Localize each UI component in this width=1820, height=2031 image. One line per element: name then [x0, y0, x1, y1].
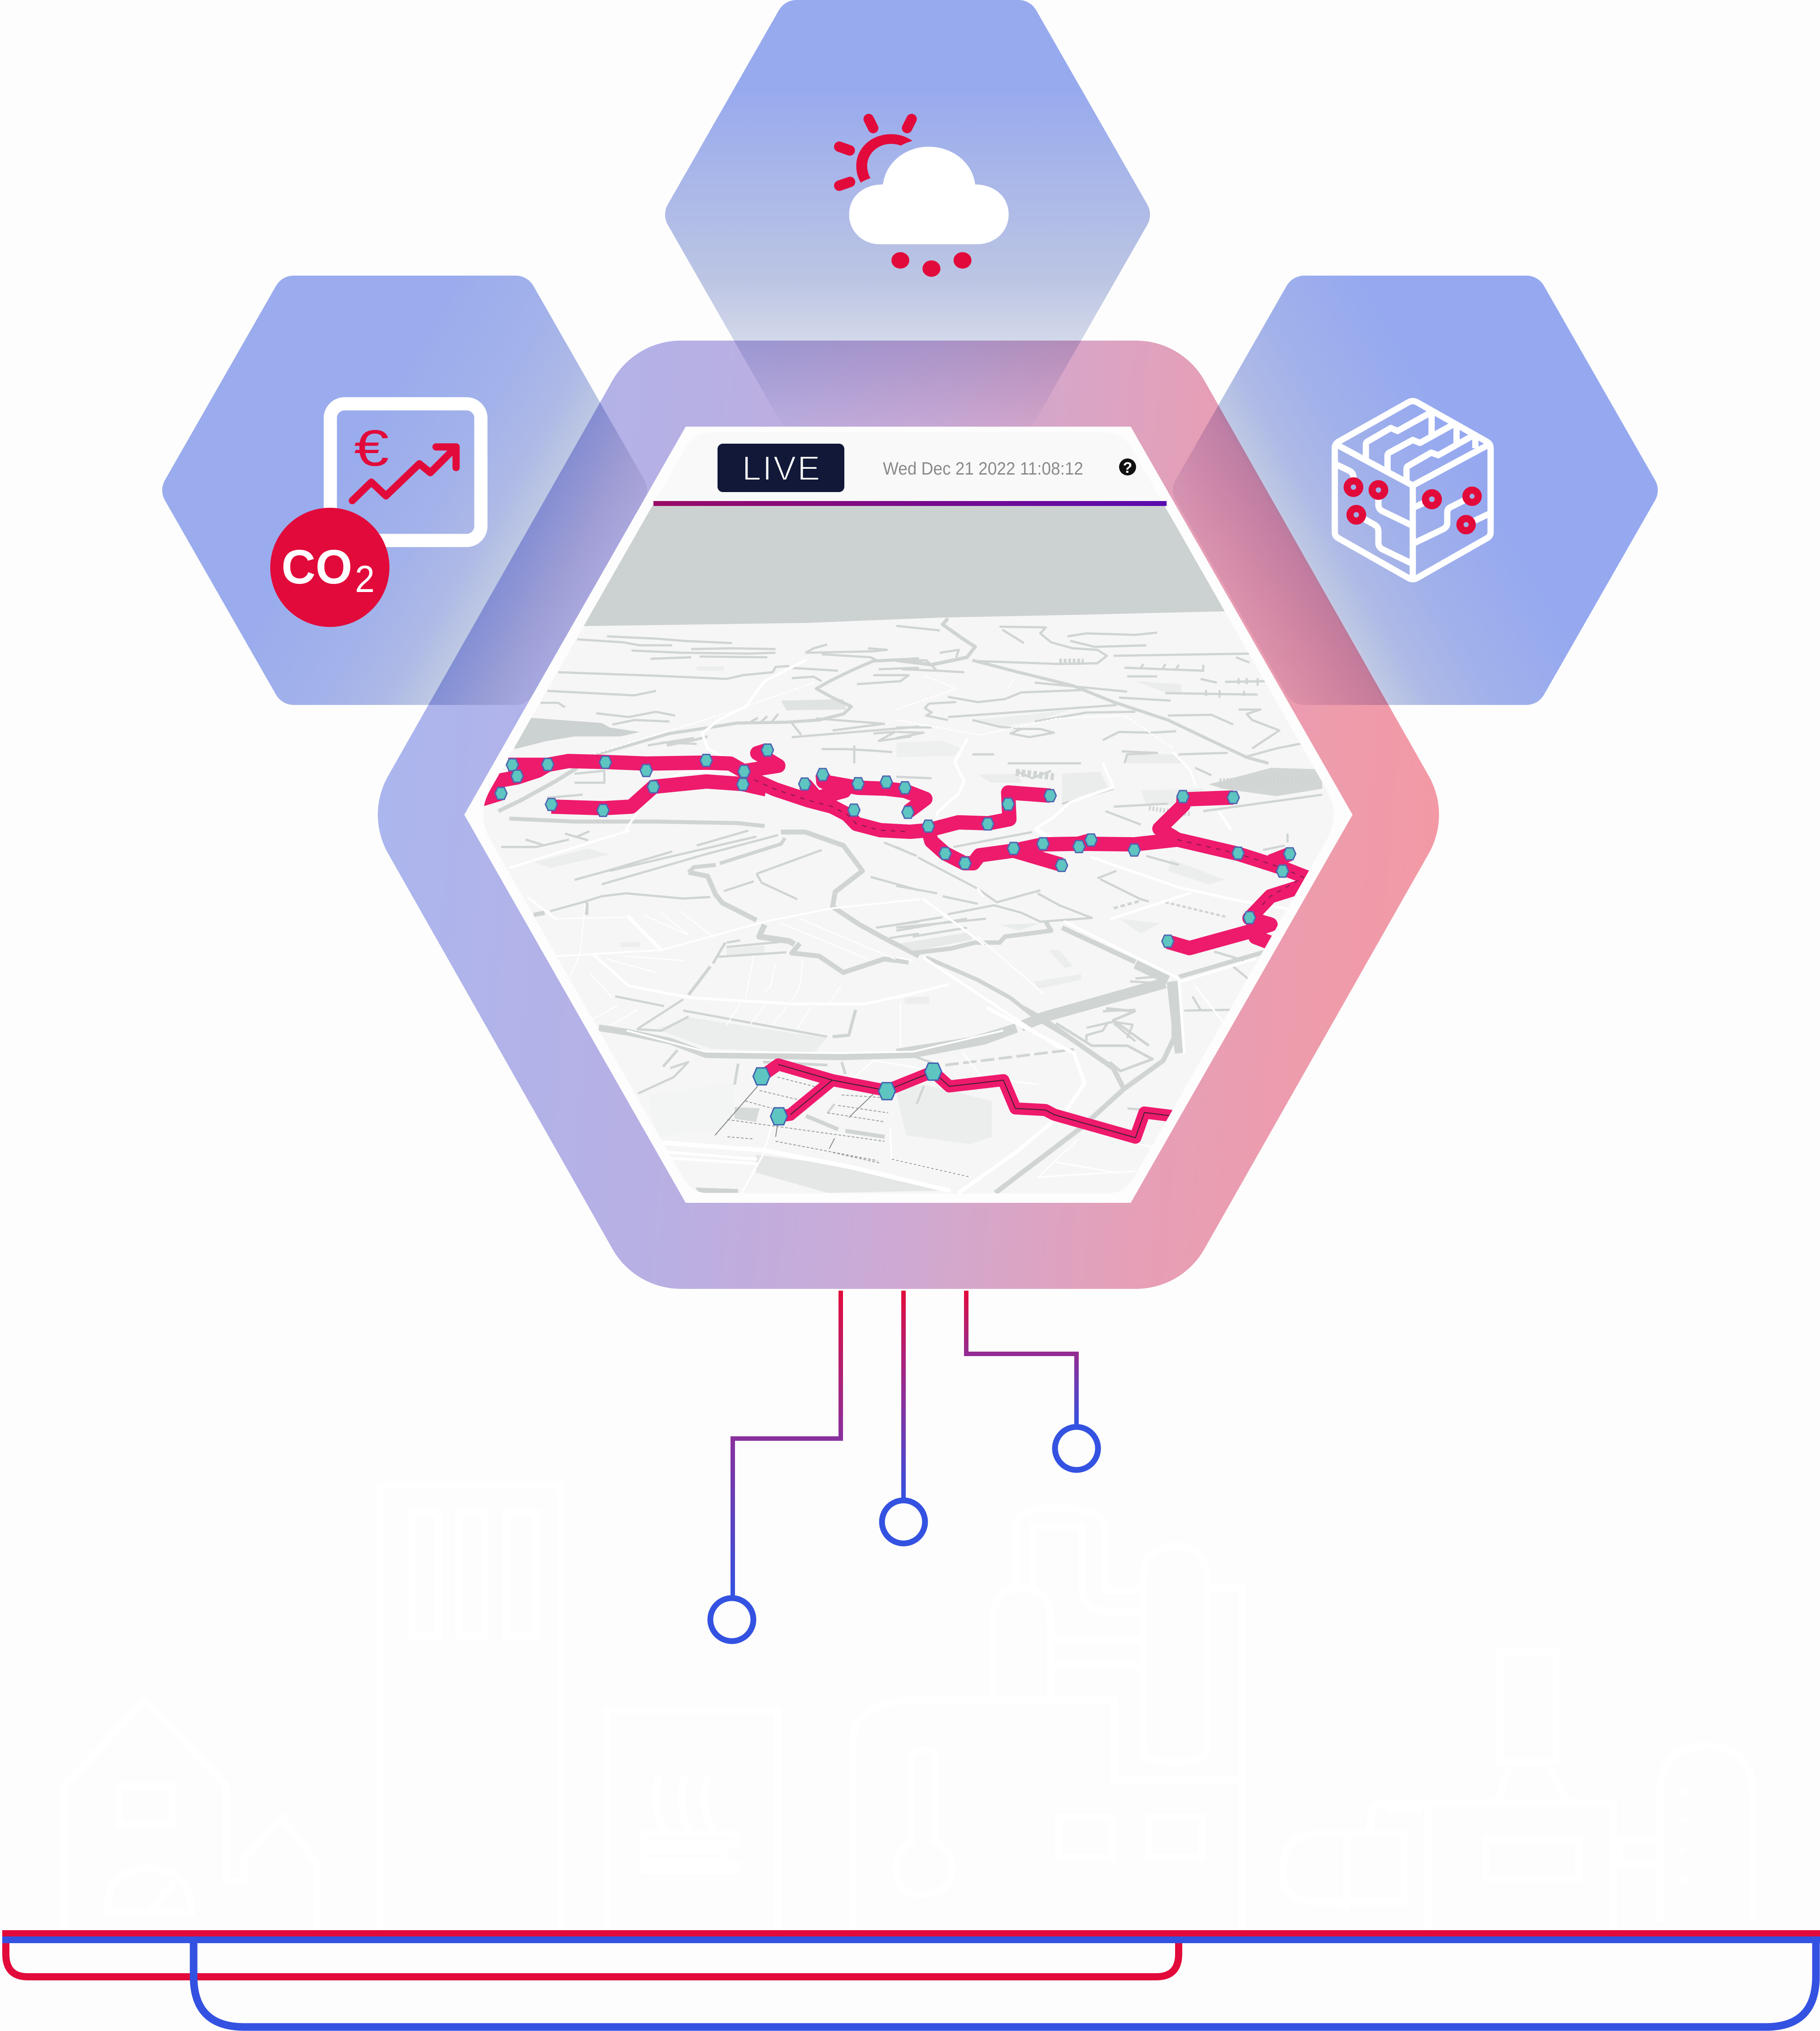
badge: LIVE: LIVE — [742, 449, 820, 488]
building: industrial plant — [1283, 1652, 1753, 1929]
route: west branch — [551, 782, 766, 808]
route: north trunk — [508, 761, 1050, 832]
map tile: south east districts — [896, 830, 1293, 1053]
building: factory with pipes — [853, 1508, 1242, 1929]
icon: help — [1119, 458, 1136, 476]
sun arc — [856, 134, 912, 182]
faint white city skyline outlines — [64, 1485, 1753, 1929]
route branch centre line — [790, 1080, 832, 1115]
route: southern network — [761, 1064, 1175, 1138]
route: southern branch — [779, 1080, 832, 1116]
panel: digital twin hexagon — [1173, 276, 1658, 705]
route: far east stub — [1271, 854, 1290, 862]
route: far west ends — [481, 793, 501, 799]
map: live heat network dashboard — [484, 506, 1323, 1193]
network nodes: teal hexagons — [495, 744, 1296, 1125]
cloud — [849, 147, 1009, 244]
panel: inner white hexagon — [464, 427, 1353, 1203]
cube outline — [1335, 401, 1491, 579]
icon: help: ? — [1123, 459, 1132, 476]
sea — [584, 506, 1225, 626]
connector: left circuit line with node — [710, 1291, 841, 1641]
icon: digital twin cube — [1335, 401, 1491, 579]
panel: central gradient hexagon frame — [378, 341, 1439, 1289]
route: central loop — [805, 784, 839, 799]
text: timestamp: Wed Dec 21 2022 11:08:12 — [883, 459, 1083, 479]
sun rays — [839, 119, 912, 186]
route: south east end — [1255, 931, 1274, 944]
icon: rising trend arrow — [352, 447, 456, 501]
rain drops — [891, 252, 972, 277]
route: eastern trunk — [928, 830, 1306, 948]
connector: centre circuit line with node — [882, 1291, 925, 1543]
connector: right circuit line with node — [966, 1291, 1098, 1470]
panel: energy price and CO2 hexagon — [162, 276, 647, 705]
map tile: north west polder — [498, 636, 919, 829]
icon: euro sign: € — [354, 420, 389, 477]
icon: chart frame — [330, 404, 481, 540]
map ground — [448, 430, 1367, 1201]
heat network routes — [481, 744, 1306, 1138]
dashboard header background — [448, 430, 1367, 504]
header gradient bar — [653, 501, 1167, 506]
route centre line — [778, 1064, 1175, 1138]
building: tower — [381, 1485, 561, 1929]
cube inner edges — [1336, 445, 1489, 579]
network: blue return bus and loop — [2, 1936, 1820, 2027]
icon: weather sun, cloud and rain — [839, 119, 1009, 277]
building: heat store — [607, 1710, 778, 1929]
label: subscript 2: 2 — [355, 558, 375, 600]
badge: LIVE — [718, 444, 844, 492]
route: central branches — [808, 774, 844, 800]
circuit traces on top face — [1366, 412, 1475, 480]
building: house — [64, 1700, 317, 1929]
network: red supply bus and loop — [2, 1930, 1820, 1977]
map tile: north east polder — [896, 618, 1322, 829]
route east centre dashes — [1177, 840, 1304, 909]
icon: CO2 circle — [270, 508, 389, 627]
route centre dashes — [754, 780, 910, 832]
route: second far west branch — [485, 765, 548, 783]
route: central east — [823, 782, 925, 811]
label: CO2: CO — [281, 540, 352, 594]
circuit traces on side faces — [1335, 464, 1491, 564]
circuit nodes — [1347, 481, 1478, 531]
map tile: southern estate and motorway — [599, 1008, 1174, 1193]
map tile: south west districts — [501, 830, 919, 1053]
route: north stub — [744, 750, 778, 771]
route: eastern stubs — [1014, 851, 1062, 865]
route: junction stub — [1078, 840, 1091, 844]
route: north east — [1159, 798, 1233, 840]
icon: euro price chart and CO2 badge — [270, 404, 481, 627]
panel: weather hexagon — [665, 0, 1150, 429]
